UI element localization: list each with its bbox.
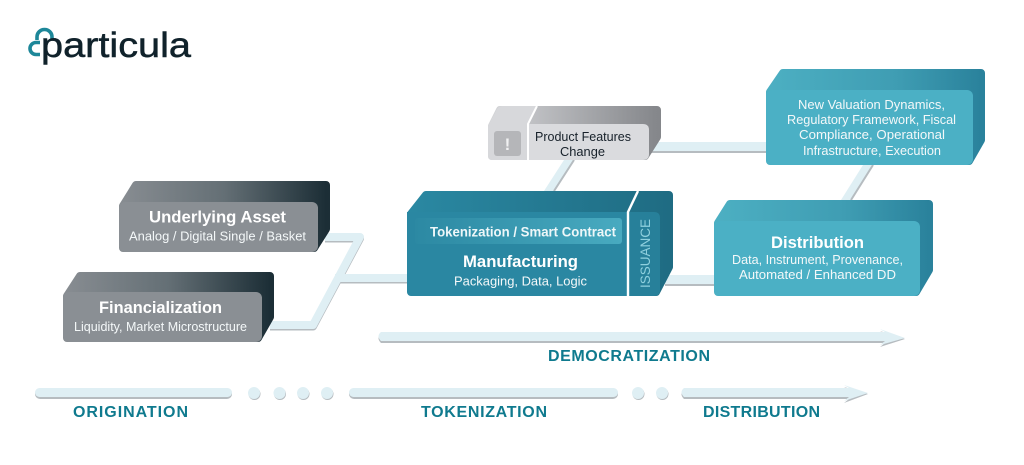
label: distribution: DISTRIBUTION (703, 404, 820, 421)
text: underlying asset detail: Analog / Digital Single / Basket (129, 228, 306, 244)
text: distribution detail: Data, Instrument, Provenance, (732, 252, 903, 267)
text: factors list: New Valuation Dynamics, (798, 97, 945, 112)
heading: underlying asset: Underlying Asset (149, 208, 286, 226)
text: product features change (535, 129, 631, 159)
heading: financialization: Financialization (99, 298, 222, 317)
label: democratization: DEMOCRATIZATION (548, 348, 710, 365)
connector: distribution to top right box (841, 165, 873, 200)
timeline: dots (248, 387, 334, 400)
panel: underlying asset (119, 185, 326, 252)
timeline: origination segment (35, 388, 232, 399)
panel: financialization (63, 276, 270, 342)
arrow: democratization (378, 329, 905, 347)
text: factors list (787, 97, 956, 158)
heading: manufacturing: Manufacturing (463, 252, 578, 271)
logo (30, 26, 192, 65)
heading: distribution: Distribution (771, 233, 864, 252)
tokenization strip: Tokenization / Smart Contract (430, 224, 616, 240)
panel: product features change (488, 106, 657, 160)
icon: warning exclamation (494, 131, 521, 156)
panel: manufacturing (407, 191, 669, 296)
icon: warning exclamation: ! (505, 135, 510, 154)
tokenization strip (415, 218, 622, 244)
text: product features change: Product Features (535, 129, 631, 144)
logo wordmark: particula (41, 26, 192, 65)
text: manufacturing detail: Packaging, Data, Logic (454, 274, 587, 288)
text: financialization detail: Liquidity, Market Microstructure (74, 319, 247, 334)
connector: manufacturing to product features (544, 160, 574, 191)
text: factors list: Infrastructure, Execution (803, 143, 941, 158)
label: issuance: ISSUANCE (637, 219, 653, 288)
text: factors list: Compliance, Operational (799, 127, 945, 142)
panel: distribution (714, 204, 929, 296)
icon: logo padlock arcs (30, 30, 52, 54)
label: tokenization: TOKENIZATION (421, 404, 547, 421)
text: product features change: Change (560, 144, 605, 159)
text: distribution detail (732, 252, 903, 282)
panel: regulatory and operational factors (766, 73, 981, 165)
connector: manufacturing to distribution (665, 275, 717, 286)
arrow: distribution timeline (682, 385, 868, 403)
label: origination: ORIGINATION (73, 404, 188, 421)
connector: product features to top right box (650, 142, 770, 153)
timeline: dots (632, 387, 668, 400)
timeline: tokenization segment (349, 388, 618, 399)
text: factors list: Regulatory Framework, Fiscal (787, 112, 956, 127)
text: distribution detail: Automated / Enhanced DD (739, 267, 896, 282)
connector: underlying asset and financialization to manufacturing (270, 237, 410, 326)
